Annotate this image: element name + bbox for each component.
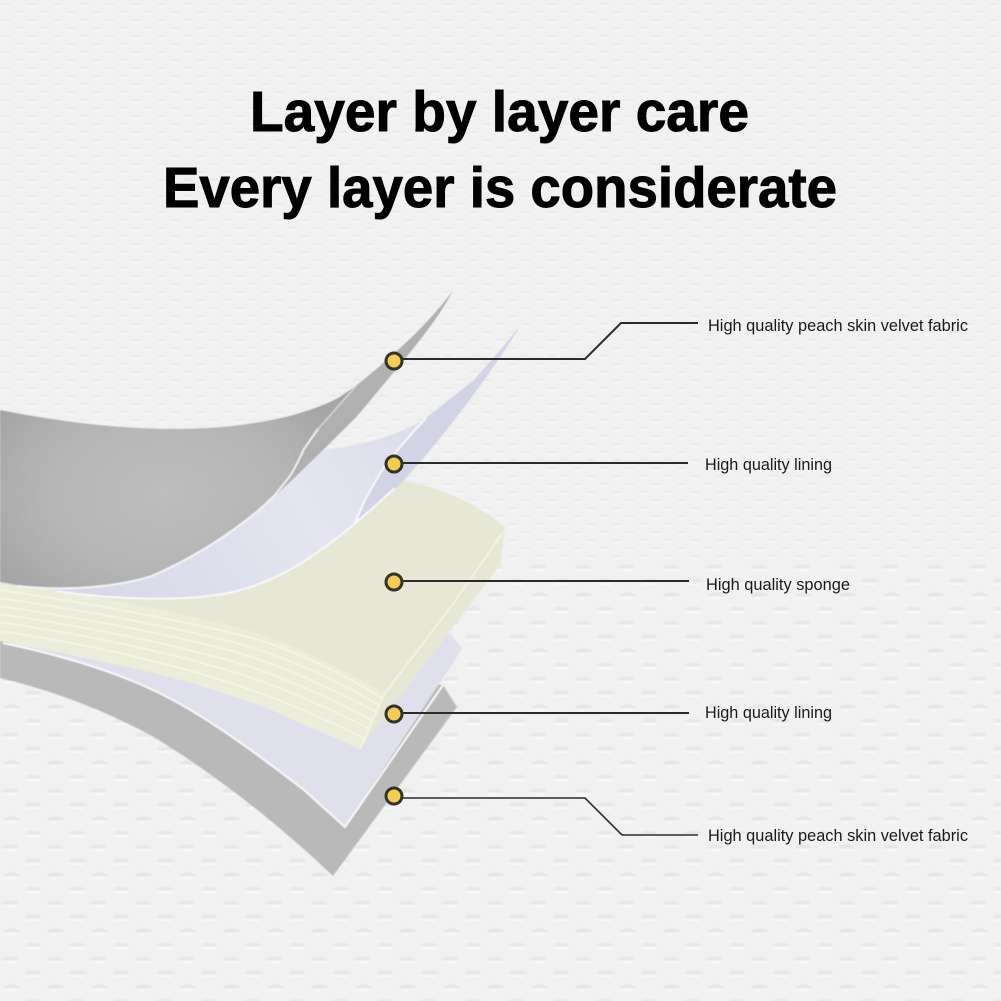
upper lining layer xyxy=(57,326,520,599)
labels: High quality peach skin velvet fabric xyxy=(708,826,968,845)
top velvet fabric layer xyxy=(0,292,452,589)
bottom velvet fabric layer xyxy=(0,640,457,876)
labels: High quality lining xyxy=(705,703,832,722)
layer illustration xyxy=(0,292,520,876)
top velvet ribbon xyxy=(290,292,452,480)
top velvet edge highlight xyxy=(18,496,274,588)
title: Layer by layer care xyxy=(250,80,749,144)
sponge edge line xyxy=(360,532,503,749)
labels: High quality lining xyxy=(705,455,832,474)
labels xyxy=(705,316,968,845)
lining fold highlight xyxy=(355,418,426,523)
top velvet fold highlight xyxy=(318,386,356,429)
sponge layer xyxy=(0,470,505,749)
top velvet fold white line xyxy=(274,429,318,496)
labels: High quality peach skin velvet fabric xyxy=(708,316,968,335)
sponge front face xyxy=(0,584,385,749)
title xyxy=(163,80,837,220)
labels: High quality sponge xyxy=(706,575,850,594)
upper lining ribbon xyxy=(355,326,520,523)
lining edge highlight xyxy=(57,488,395,599)
bottom lining layer xyxy=(3,634,462,827)
marker dots xyxy=(386,353,402,804)
sponge stripes xyxy=(0,590,382,738)
leader lines xyxy=(400,323,698,835)
bottom lining edge highlight xyxy=(3,643,443,827)
title: Every layer is considerate xyxy=(163,156,837,220)
